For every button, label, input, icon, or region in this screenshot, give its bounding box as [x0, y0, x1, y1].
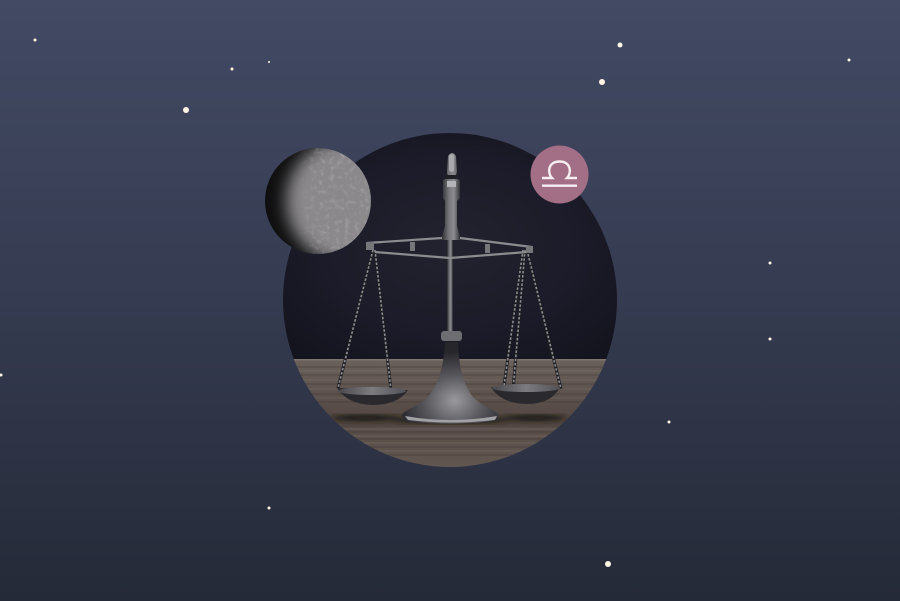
table shadows: [330, 414, 567, 424]
badge: Libra sign: [530, 146, 588, 204]
icon: Libra glyph: [542, 162, 577, 186]
wooden table: [283, 359, 617, 468]
planet: Mercury: [265, 148, 371, 254]
central pole: [447, 240, 453, 332]
wall backdrop: [283, 133, 617, 360]
photo circle: scales on table: [283, 133, 617, 468]
pillar top: [441, 153, 461, 240]
left pan: [337, 387, 408, 405]
stand base: [402, 342, 498, 424]
chains: [338, 250, 561, 390]
scale: balance: [337, 153, 561, 424]
right pan: [491, 384, 560, 404]
beam: [367, 238, 532, 258]
